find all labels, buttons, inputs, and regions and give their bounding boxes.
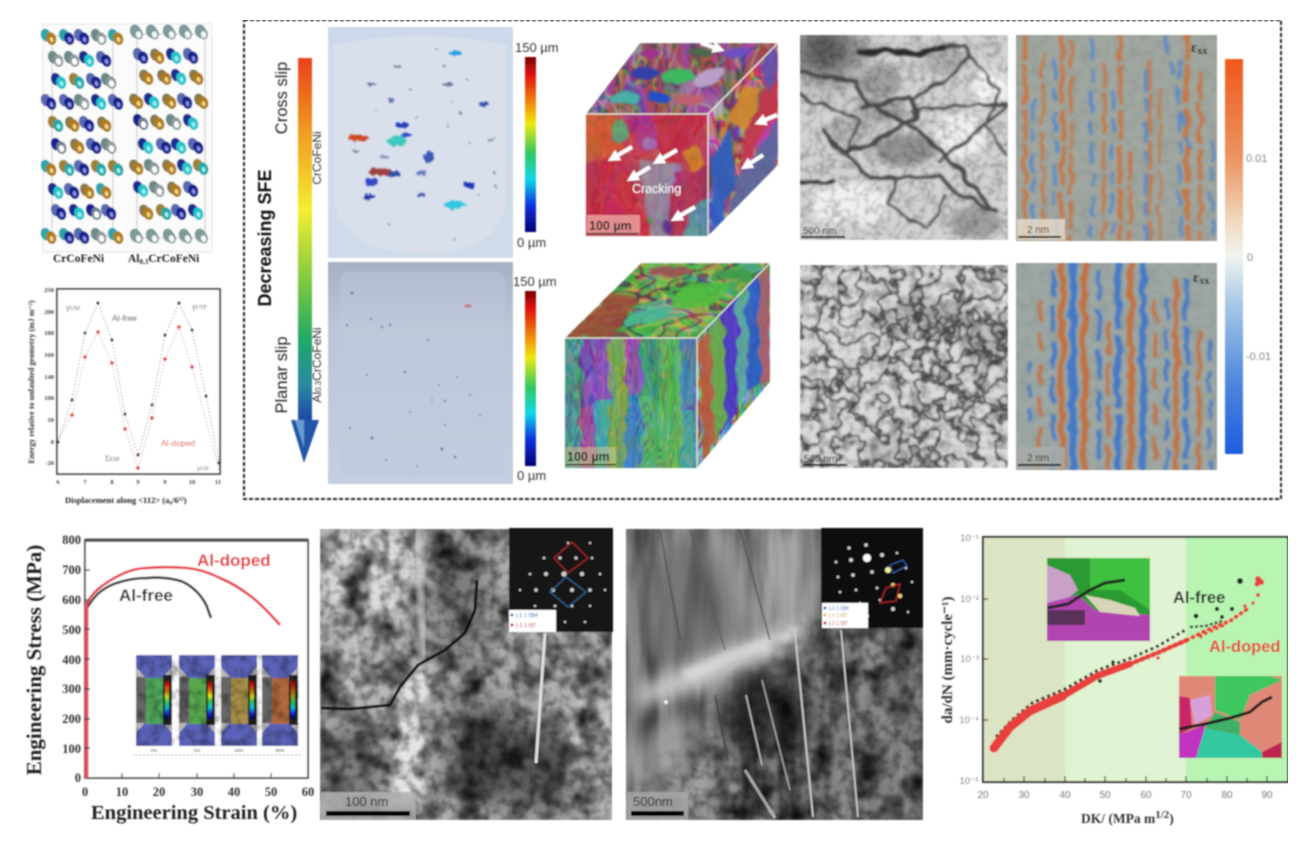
- scale bar: 2 nm: 2 nm: [1027, 225, 1049, 236]
- label: Cross slip: Cross slip: [273, 62, 291, 134]
- legend: diffraction zones: [509, 610, 556, 632]
- legend: diffraction zones: [-1 1 0]T: [829, 613, 848, 619]
- label: strain component εxx: xx: [1199, 276, 1209, 287]
- x axis tick labels: 90: [1261, 790, 1273, 801]
- x axis title: Displacement along <112> (a₀/6¹²): [65, 495, 187, 505]
- blue strain bands: [1033, 35, 1212, 245]
- legend: diffraction zones: [-1 1 0]T: [829, 621, 848, 627]
- scale bar: 100 µm: [566, 447, 616, 467]
- colorbar: top depth scale 0 to 150 µm: 150 µm: [515, 40, 559, 55]
- panel: strain map Al0.3CrCoFeNi: [1016, 258, 1217, 475]
- x axis tick labels: 30: [1018, 790, 1030, 801]
- panel: dashed frame of microstructure comparison: [244, 20, 1281, 499]
- x axis title: 1/2: [1155, 809, 1170, 821]
- chart: engineering stress-strain curves: [22, 533, 314, 824]
- label: Al-doped: Al-doped: [1209, 638, 1280, 656]
- curve: Al-doped energy points: [58, 325, 219, 470]
- x axis tick labels: 20: [153, 785, 165, 799]
- curve: Al-free energy points: [56, 301, 221, 465]
- y axis tick labels: 0: [51, 439, 54, 446]
- orange strain bands: [1040, 258, 1199, 475]
- y axis tick labels: 400: [62, 653, 81, 667]
- x axis tick labels: 30: [191, 785, 203, 799]
- y axis tick labels: 300: [62, 682, 81, 696]
- atoms: CrCoFeNi supercell: [39, 26, 125, 247]
- panel: tomography CrCoFeNi: [328, 27, 513, 258]
- label: strain component εxx: ε: [1191, 40, 1197, 56]
- y axis tick labels: 500: [62, 623, 81, 637]
- label: strain component εxx: ε: [1193, 270, 1199, 286]
- orange strain bands: [1025, 30, 1200, 245]
- scale bar: 500 nm: 500nm: [633, 794, 673, 809]
- x axis tick labels: 70: [1180, 790, 1192, 801]
- colorbar: strain scale: -0.01: [1246, 351, 1271, 363]
- x axis tick labels: 11: [215, 479, 221, 486]
- label: Al-free: Al-free: [112, 313, 137, 323]
- colorbar: bottom depth scale 0 to 150 µm: 0 µm: [517, 468, 546, 483]
- scale bar: 100 µm: [587, 215, 640, 235]
- y axis tick labels: [44, 287, 54, 467]
- inset: tensile strain maps: 60%: [275, 748, 285, 753]
- y axis title: da/dN (mm·cycle⁻¹): [940, 597, 956, 723]
- inset: tensile strain maps: 40%: [234, 748, 244, 753]
- annotation labels: γUSF: [65, 303, 81, 312]
- chart: fatigue crack growth rate: [940, 533, 1288, 826]
- x axis tick labels: 7: [83, 479, 87, 486]
- y axis tick labels: 180: [44, 330, 54, 337]
- y axis tick labels: 800: [62, 533, 81, 547]
- y axis tick labels: [959, 533, 979, 787]
- y axis tick labels: 700: [62, 563, 81, 577]
- x axis tick labels: 60: [302, 785, 314, 799]
- colorbar: bottom depth scale 0 to 150 µm: 150 µm: [513, 274, 557, 289]
- legend: diffraction zones: [-1 1 0]M: [516, 613, 538, 619]
- x axis tick labels: 10: [189, 479, 195, 486]
- panel: EBSD cube CrCoFeNi: [576, 43, 778, 245]
- inset: diffraction pattern left: [509, 528, 613, 632]
- x axis title: ): [1169, 811, 1174, 826]
- x axis tick labels: [977, 790, 1273, 801]
- cube right face: [708, 43, 778, 236]
- x axis tick labels: 9: [136, 479, 140, 486]
- series: Al-doped points: [994, 576, 1264, 748]
- label: Planar slip: Planar slip: [273, 336, 291, 414]
- atoms: Al0.3CrCoFeNi supercell: [127, 23, 210, 246]
- label: CrCoFeNi: CrCoFeNi: [53, 253, 105, 265]
- curve: Al-doped: [87, 567, 280, 778]
- scale bar: 2 nm: 2 nm: [1027, 453, 1049, 464]
- y axis title: Energy relative to unfaulted geometry (mJ m⁻²): [27, 300, 36, 464]
- scale bar: 100 nm: 100 nm: [345, 794, 388, 809]
- label: Al-free: Al-free: [119, 586, 173, 605]
- x axis tick labels: 10: [116, 785, 128, 799]
- blue strain bands: [1030, 258, 1210, 475]
- scale bar: 100 µm: 100 µm: [567, 450, 610, 464]
- scale bar: 2 nm: [1017, 447, 1065, 469]
- panel: TEM image with crack and twins: [315, 525, 616, 822]
- background regions: [983, 537, 1288, 782]
- annotation labels: ΣESF: [105, 454, 121, 463]
- y axis tick labels: 10⁻¹: [960, 533, 979, 544]
- x axis title: DK/ (MPa m: [1081, 811, 1155, 826]
- colorbar: top depth scale 0 to 150 µm: [515, 40, 559, 250]
- y axis tick labels: 10⁻⁴: [959, 715, 979, 726]
- legend: diffraction zones: [-1 1 0]M: [829, 606, 849, 612]
- inset: tensile strain maps: [135, 655, 302, 755]
- cube right face: [697, 263, 770, 468]
- scale bar: 500 nm: [803, 454, 847, 466]
- legend: diffraction zones: [-1 1 0]T: [516, 623, 537, 629]
- label: Al0.3CrCoFeNi: Al: [128, 253, 140, 265]
- arrows: crack direction: [613, 43, 777, 218]
- x axis tick labels: 6: [56, 479, 60, 486]
- scale bar: 100 µm: 100 µm: [589, 219, 632, 233]
- label: Al-doped: Al-doped: [161, 438, 195, 448]
- x axis tick labels: 40: [1059, 790, 1071, 801]
- label: Al-free: Al-free: [1173, 589, 1225, 607]
- colorbar: strain scale: 0: [1247, 252, 1253, 264]
- twin streak: [536, 633, 545, 763]
- annotation labels: γUSF: [196, 465, 209, 472]
- scale bar: 500 nm: [627, 792, 688, 820]
- scale bar: 500 nm: [801, 226, 845, 238]
- x axis tick labels: 0: [82, 785, 88, 799]
- colorbar: strain scale: 0.01: [1246, 153, 1267, 165]
- chart: stacking fault energy versus displacement: [27, 287, 221, 505]
- twin streaks: [660, 530, 858, 818]
- label: Cracking: Cracking: [632, 182, 681, 196]
- inset: tensile strain maps: 5%: [194, 748, 200, 753]
- dislocation walls: [800, 45, 1007, 228]
- x axis tick labels: 60: [1140, 790, 1152, 801]
- voids: crack defect blobs: [348, 49, 498, 241]
- inset: diffraction pattern right: [821, 528, 923, 628]
- x axis tick labels: [82, 785, 314, 799]
- label: Al0.3CrCoFeNi rotated: Al0.3CrCoFeNi: [310, 327, 324, 403]
- inset: crack micrograph Al-free: [1047, 558, 1150, 641]
- series: Al-free points: [996, 578, 1243, 737]
- panel: TEM dislocations Al0.3CrCoFeNi: [800, 265, 1008, 468]
- label: Al0.3CrCoFeNi: 0.3: [140, 258, 149, 266]
- x axis tick labels: 80: [1221, 790, 1233, 801]
- y axis tick labels: 140: [44, 374, 54, 381]
- y axis tick labels: 250: [44, 287, 54, 294]
- axis tick marks: [983, 599, 1267, 782]
- label: Al-doped: Al-doped: [197, 551, 271, 570]
- panel: atomic supercell structures: [39, 23, 212, 266]
- y axis tick labels: 160: [44, 352, 54, 359]
- colorbar: bottom depth scale 0 to 150 µm: [513, 274, 557, 483]
- scale bar: 2 nm: [1017, 219, 1065, 240]
- annotation labels: [65, 302, 209, 472]
- y axis tick labels: [62, 533, 81, 785]
- y axis tick labels: 50: [48, 417, 54, 424]
- x axis tick labels: 20: [977, 790, 989, 801]
- annotation labels: γUTF: [191, 302, 208, 311]
- panel: TEM image with deformation twins: [626, 528, 940, 820]
- colorbar: strain scale: [1225, 59, 1271, 454]
- colorbar: top depth scale 0 to 150 µm: 0 µm: [517, 235, 546, 250]
- x axis tick labels: 8: [110, 479, 114, 486]
- scale bar: 100 nm: [321, 792, 416, 820]
- y axis tick labels: 200: [44, 309, 54, 316]
- legend: diffraction zones: [822, 603, 868, 628]
- arrow: decreasing SFE: [291, 58, 319, 463]
- panel: strain map CrCoFeNi: [1016, 30, 1217, 245]
- y axis tick labels: 600: [62, 593, 81, 607]
- label: CrCoFeNi rotated: CrCoFeNi: [310, 131, 324, 185]
- scale bar: 500 nm: 500 nm: [804, 454, 837, 465]
- panel: EBSD cube Al0.3CrCoFeNi: [560, 263, 770, 475]
- label: Decreasing SFE: Decreasing SFE: [255, 169, 275, 307]
- y axis title: Engineering Stress (MPa): [22, 545, 46, 775]
- x axis tick labels: 9: [163, 479, 167, 486]
- axis tick marks: [85, 570, 271, 778]
- cube front face: [564, 338, 698, 470]
- crack line: [321, 580, 477, 709]
- y axis tick labels: 10⁻⁵: [959, 776, 979, 787]
- x axis title: Engineering Strain (%): [91, 802, 297, 824]
- inset: crack micrograph Al-doped: [1179, 676, 1282, 758]
- y axis tick labels: 10⁻²: [960, 594, 979, 605]
- panel: TEM dislocation cells CrCoFeNi: [791, 22, 1008, 240]
- x axis tick labels: [56, 479, 221, 486]
- x axis tick labels: 40: [228, 785, 240, 799]
- cube top face: [586, 43, 778, 114]
- cube top face: [565, 263, 770, 338]
- inset: tensile strain maps: 0%: [151, 748, 157, 753]
- x axis tick labels: 50: [1099, 790, 1111, 801]
- scale bar: 500 nm: 500 nm: [803, 226, 836, 237]
- y axis tick labels: 100: [44, 395, 54, 402]
- x axis tick labels: 50: [265, 785, 277, 799]
- cube front face: [584, 114, 708, 238]
- y axis tick labels: -20: [45, 460, 54, 467]
- y axis tick labels: 10⁻³: [960, 654, 979, 665]
- y axis tick labels: 100: [62, 742, 81, 756]
- label: Al0.3CrCoFeNi: CrCoFeNi: [148, 253, 200, 265]
- y axis tick labels: 0: [75, 771, 81, 785]
- label: strain component εxx: xx: [1197, 46, 1207, 57]
- panel: SFE gradient arrow and labels: [255, 58, 324, 463]
- curve: Al-free: [87, 578, 211, 778]
- panel: tomography Al0.3CrCoFeNi: [328, 262, 513, 484]
- voids: sparse defect dots: [346, 291, 481, 467]
- y axis tick labels: 200: [62, 712, 81, 726]
